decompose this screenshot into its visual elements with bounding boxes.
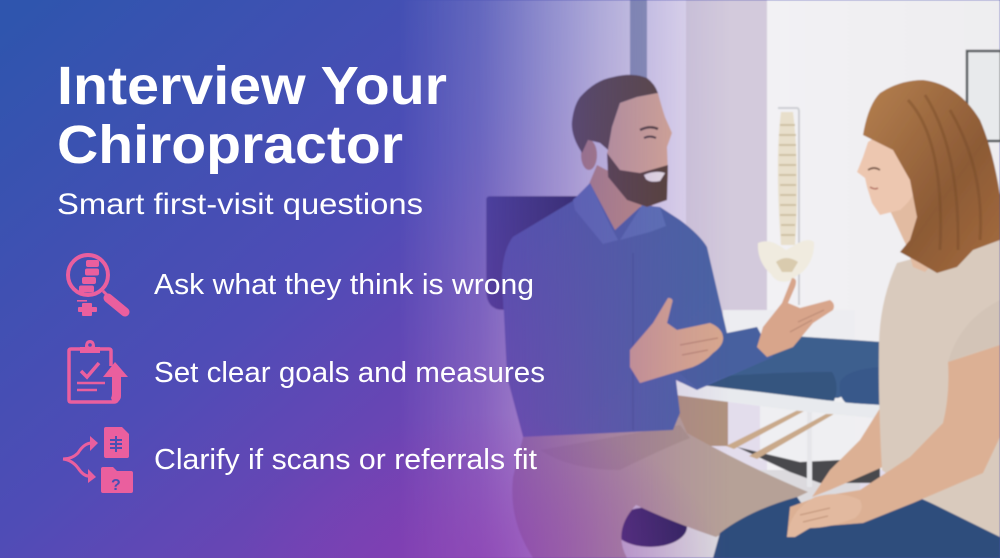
stool	[613, 507, 687, 547]
item 2: goals and measures	[69, 340, 545, 403]
man	[502, 75, 834, 558]
left hand	[630, 298, 723, 383]
label: Set clear goals and measures	[154, 357, 545, 389]
t-shirt	[879, 238, 1000, 537]
icon: magnifier over spine	[68, 255, 125, 316]
title: Chiropractor	[57, 115, 403, 175]
ear	[581, 140, 597, 170]
woman	[713, 80, 1000, 558]
near arm	[787, 345, 1000, 537]
neck	[580, 165, 655, 262]
right hand	[757, 278, 834, 357]
cabinet	[675, 310, 880, 487]
hair	[572, 75, 658, 153]
purple gradient overlay	[0, 0, 713, 558]
clasped hands	[787, 494, 862, 537]
hair	[863, 80, 1000, 273]
jeans	[713, 495, 1000, 558]
title: Interview Your	[57, 56, 447, 116]
label: Ask what they think is wrong	[154, 269, 534, 301]
icon: clipboard with arrow	[69, 340, 128, 403]
shirt	[502, 183, 773, 437]
treatment table	[675, 333, 882, 459]
model spine on stand	[758, 108, 814, 305]
face	[607, 93, 672, 207]
item 3: scans and referrals	[63, 427, 537, 494]
neck	[885, 180, 945, 272]
beard	[607, 153, 668, 207]
subtitle: Smart first-visit questions	[57, 188, 423, 221]
far arm	[812, 405, 885, 497]
face	[857, 125, 921, 215]
eye and brow	[640, 127, 658, 130]
trousers	[512, 417, 808, 558]
floor	[600, 470, 860, 558]
icon: branching arrows to x-ray and folder: ?	[111, 477, 121, 494]
item 1: diagnosis question	[68, 255, 534, 316]
icon: branching arrows to x-ray and folder	[63, 427, 133, 494]
label: Clarify if scans or referrals fit	[154, 444, 537, 476]
title	[57, 56, 447, 175]
chair back	[486, 196, 580, 310]
